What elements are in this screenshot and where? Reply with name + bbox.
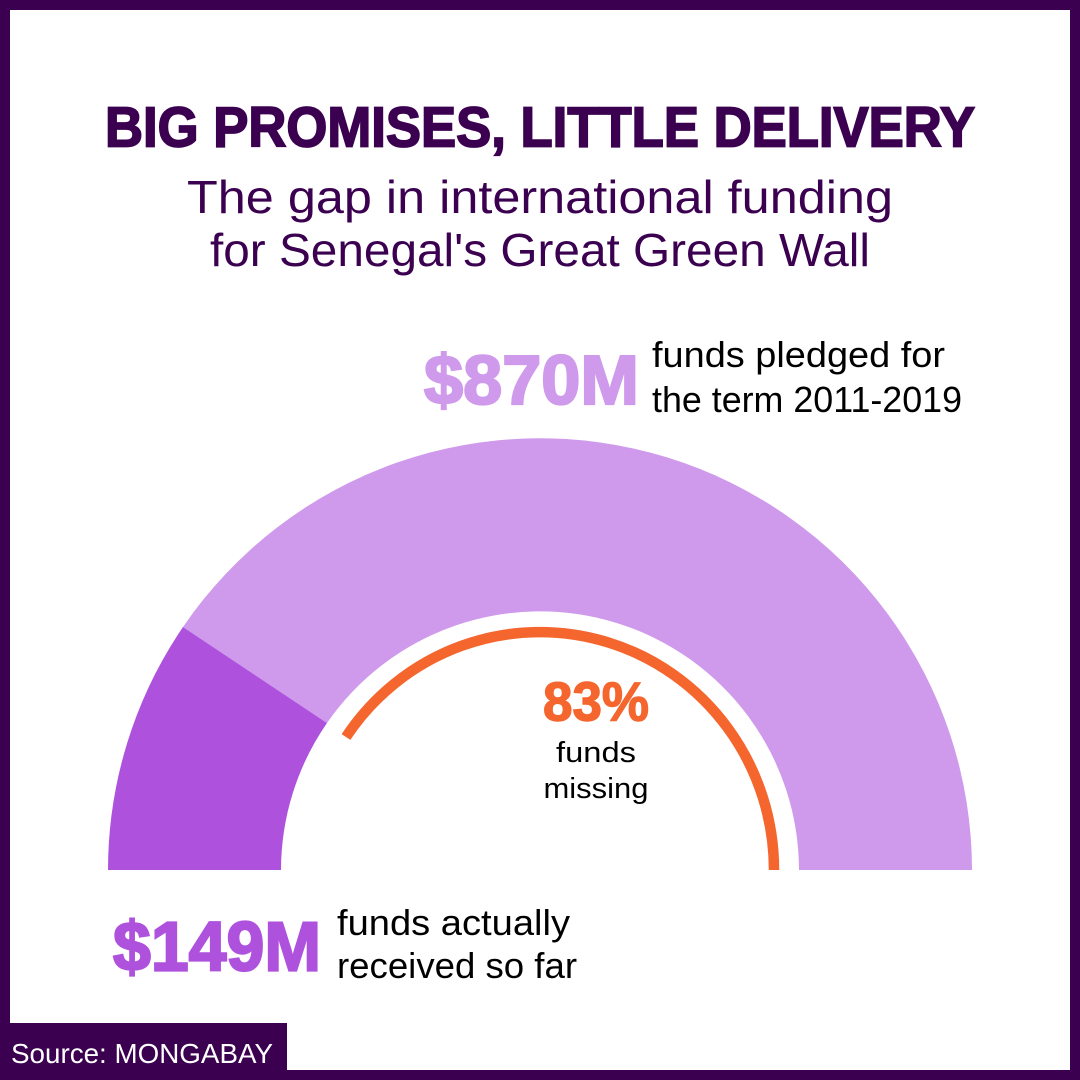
pledged funds label: $870M bbox=[424, 341, 639, 419]
gauge segment: funds pledged remainder bbox=[183, 438, 972, 870]
subtitle: for Senegal's Great Green Wall bbox=[210, 224, 870, 276]
received funds label bbox=[113, 902, 577, 986]
received funds label: funds actually bbox=[337, 902, 570, 943]
pledged funds label: funds pledged for bbox=[652, 334, 945, 375]
received funds label: $149M bbox=[113, 908, 321, 986]
gauge chart bbox=[108, 438, 972, 870]
subtitle: The gap in international funding bbox=[187, 171, 893, 223]
source tag: Source: MONGABAY bbox=[11, 1038, 273, 1069]
missing funds label bbox=[543, 670, 649, 805]
source tag bbox=[0, 1023, 287, 1080]
received funds label: received so far bbox=[337, 945, 577, 986]
subtitle bbox=[187, 171, 893, 276]
title: BIG PROMISES, LITTLE DELIVERY bbox=[105, 96, 975, 160]
orange arc: funds missing bbox=[346, 632, 774, 870]
pledged funds label: the term 2011-2019 bbox=[652, 379, 962, 420]
missing funds label: missing bbox=[544, 773, 648, 805]
pledged funds label bbox=[424, 334, 962, 420]
missing funds label: 83% bbox=[543, 670, 649, 732]
gauge segment: funds received bbox=[108, 627, 327, 870]
missing funds label: funds bbox=[556, 737, 636, 769]
